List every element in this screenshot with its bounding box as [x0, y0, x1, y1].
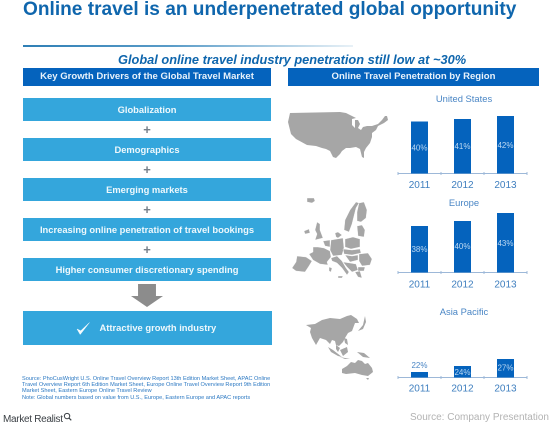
plus: +: [143, 122, 151, 137]
result text: Attractive growth industry: [100, 322, 216, 333]
driver: demographics: Demographics: [114, 144, 180, 155]
driver: emerging markets: [23, 178, 271, 201]
chart: United States: 40%: [411, 144, 428, 152]
chart: Europe: Europe: [449, 197, 479, 208]
result box: [22, 311, 272, 345]
source note: [22, 376, 270, 401]
left header: Key Growth Drivers of the Global Travel Market: [40, 71, 254, 82]
driver: online penetration: [23, 218, 271, 241]
watermark: Market Realist: Market Realist: [3, 414, 63, 425]
chart: Europe: 40%: [454, 242, 471, 251]
chart: United States: 2012: [451, 180, 474, 191]
chart: United States: 2011: [409, 180, 431, 191]
driver: demographics: [23, 138, 271, 161]
chart: United States: 41%: [454, 142, 471, 151]
plus: +: [143, 242, 151, 257]
chart: Asia Pacific: 2013: [494, 384, 517, 394]
chart: Asia Pacific: 27%: [497, 364, 514, 372]
left header: [23, 68, 271, 86]
chart: Asia Pacific: 24%: [454, 368, 471, 377]
driver: discretionary spending: [23, 258, 271, 281]
right header: Online Travel Penetration by Region: [332, 71, 495, 82]
title rule: [23, 45, 353, 47]
chart: United States: 2013: [494, 180, 517, 191]
chart: United States: United States: [436, 93, 492, 104]
chart: United States: 42%: [497, 141, 514, 150]
driver: online penetration: Increasing online penetration of travel bookings: [40, 224, 254, 235]
source note: Market Sheet, Eastern Europe Online Travel Review: [22, 388, 152, 394]
chart: Europe: 38%: [411, 245, 428, 254]
chart: Asia Pacific: 2011: [409, 384, 431, 394]
arrow: down to result: [131, 284, 163, 307]
driver: globalization: Globalization: [118, 104, 176, 115]
driver: emerging markets: Emerging markets: [106, 184, 188, 195]
subtitle: Global online travel industry penetration still low at ~30%: [118, 52, 466, 67]
source note: Note: Global numbers based on value from U.S., Europe, Eastern Europe and APAC reports: [22, 395, 250, 401]
chart: Europe: 43%: [497, 239, 514, 248]
chart: Europe: 2012: [451, 280, 474, 290]
chart: Europe: 2013: [494, 280, 517, 290]
source note: Travel Overview Report 6th Edition Market Sheet, Europe Online Travel Overview Report 9th Edition: [22, 382, 270, 388]
plus: +: [143, 202, 151, 217]
icon: check mark: [76, 322, 90, 334]
chart: Asia Pacific: 22%: [411, 361, 428, 370]
right header: [288, 68, 539, 86]
driver: discretionary spending: Higher consumer discretionary spending: [56, 264, 238, 275]
source credit: Source: Company Presentation: [410, 412, 549, 423]
chart: Asia Pacific: Asia Pacific: [440, 306, 489, 317]
source note: Source: PhoCusWright U.S. Online Travel Overview Report 13th Edition Market Sheet, APAC Online: [22, 376, 270, 382]
chart: Asia Pacific: 2012: [451, 384, 474, 394]
plus: +: [143, 162, 151, 177]
chart: Europe: 2011: [409, 280, 431, 290]
driver: globalization: [23, 98, 271, 121]
